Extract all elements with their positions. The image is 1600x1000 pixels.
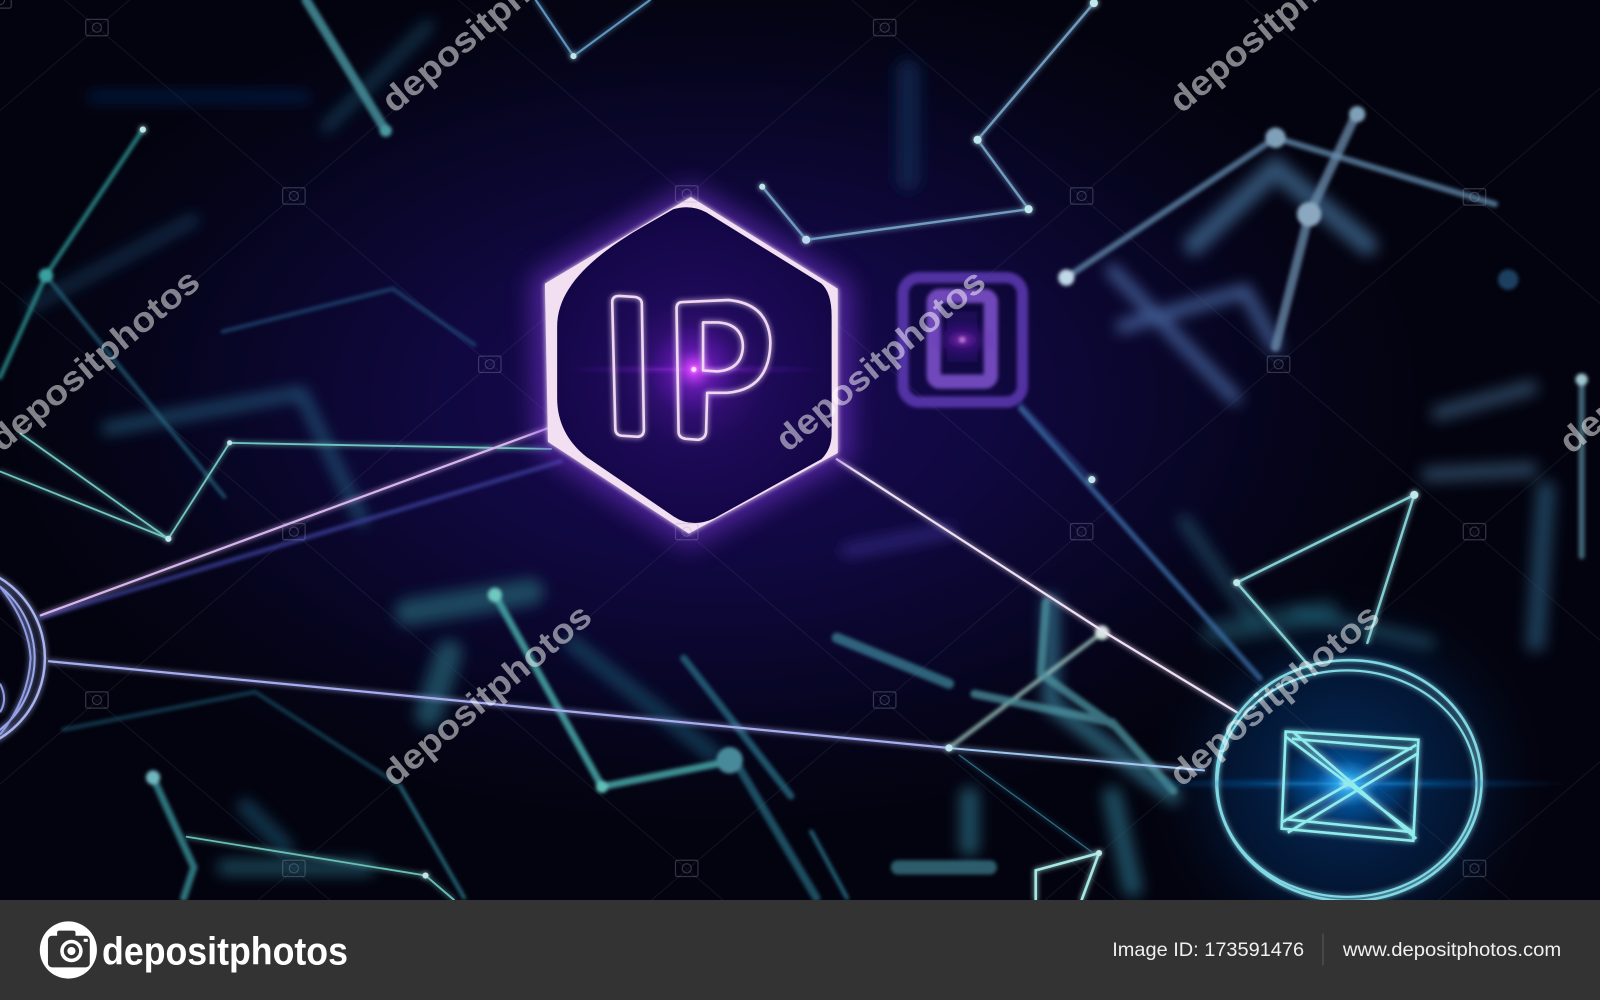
lens flare [561,323,827,415]
divider [1322,934,1323,965]
watermarks: depositphotos [768,262,993,459]
watermarks [0,0,1600,794]
icon: blurred purple square [903,278,1022,402]
icon: mail circle [1122,660,1571,901]
footer bar [0,900,1600,1000]
letters: IP outline [612,296,770,440]
logo text: depositphotos [102,930,348,973]
envelope [1282,732,1418,841]
image id: Image ID: 173591476 [1112,939,1304,961]
website: www.depositphotos.com [1342,939,1561,961]
hexagon interior [557,207,832,523]
lens flare [1122,735,1571,833]
icon: IP hexagon [545,197,838,534]
logo icon [40,921,97,979]
watermarks: depositphotos [1162,597,1387,794]
sharp network lines [0,0,1418,900]
icon: left circle [0,564,45,752]
hexagon body [545,197,838,534]
central glow [531,184,852,549]
watermarks: depositphotos [375,597,599,794]
